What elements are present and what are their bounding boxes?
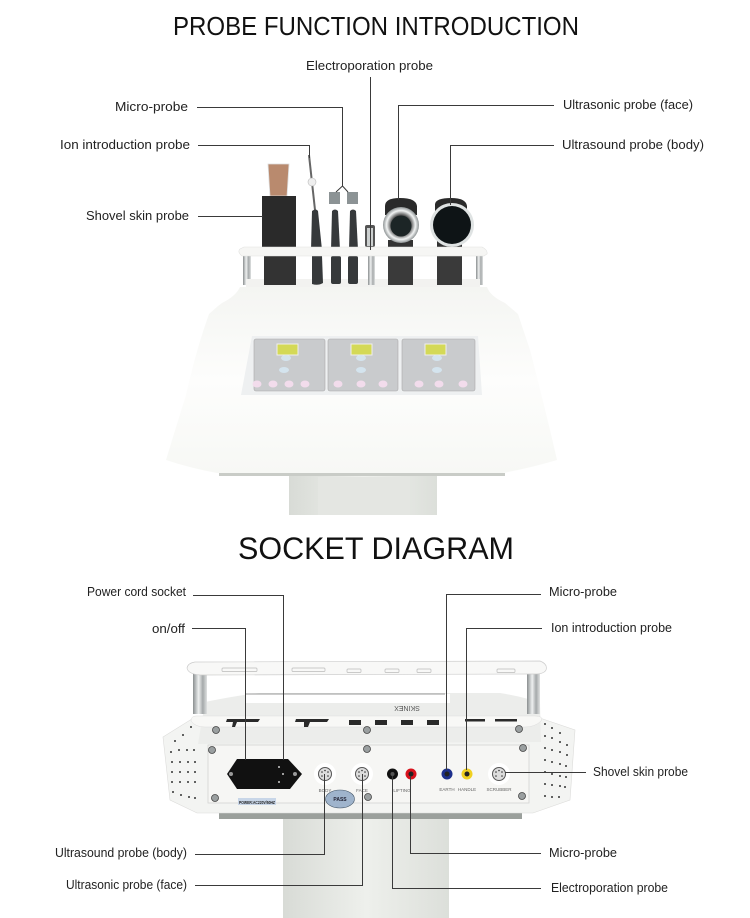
- label: power cord socket: Power cord socket: [87, 585, 186, 599]
- blue buttons: [279, 355, 442, 373]
- power label: POWER:AC220V/50HZ: [239, 800, 275, 805]
- label: on/off: on/off: [152, 622, 186, 636]
- rack front plate with slots: [191, 716, 542, 727]
- vent holes left: [170, 726, 196, 799]
- socket: handle yellow: HANDLE: [458, 787, 476, 792]
- socket: scrubber: [486, 763, 512, 792]
- probe rack: [243, 255, 483, 287]
- screws: [208, 726, 526, 802]
- rear plate: [208, 745, 529, 803]
- label: micro-probe lower: Micro-probe: [549, 846, 617, 860]
- title: socket diagram: SOCKET DIAGRAM: [238, 530, 514, 566]
- shovel skin probe: [262, 164, 296, 285]
- white label strip: [245, 694, 450, 711]
- socket: body: [314, 763, 336, 793]
- callouts: socket diagram: [55, 585, 688, 895]
- label: micro-probe right: [446, 585, 617, 770]
- pedestal: [289, 474, 437, 515]
- socket: lifting red: LIFTING: [393, 788, 411, 793]
- displays: [277, 344, 446, 355]
- lid: [198, 693, 541, 744]
- socket: body: BODY: [319, 788, 331, 793]
- pedestal: [219, 812, 522, 918]
- socket: face: FACE: [356, 788, 368, 793]
- power label: [238, 798, 276, 805]
- socket: earth blue: [439, 768, 455, 792]
- label: ion introduction probe: Ion introduction probe: [60, 137, 190, 152]
- label: electroporation probe lower: [392, 776, 668, 895]
- socket: handle yellow: [458, 768, 476, 792]
- label: electroporation probe: Electroporation probe: [306, 58, 433, 73]
- label: ion introduction probe: [60, 137, 310, 158]
- QC pass sticker: [326, 790, 354, 808]
- label: ultrasound probe (body) left: [55, 774, 324, 860]
- socket: lifting black: [387, 768, 398, 780]
- label: ultrasound probe (body): Ultrasound probe (body): [562, 137, 704, 152]
- control panel: [241, 336, 482, 395]
- label: power cord socket: [87, 585, 284, 760]
- label: ultrasonic probe (face) left: [66, 774, 362, 892]
- vent holes right: [544, 723, 568, 798]
- label: ultrasound probe (body): [450, 137, 704, 205]
- label: micro-probe: [115, 99, 348, 192]
- label: ion introduction probe right: [466, 621, 672, 770]
- label: ultrasonic probe (face): [398, 97, 693, 200]
- rear housing: [163, 717, 575, 813]
- socket: earth blue: EARTH: [439, 787, 455, 792]
- ultrasonic probe (face): [383, 198, 419, 285]
- callouts: probe function: [60, 58, 704, 250]
- electroporation probe: [365, 225, 375, 285]
- rack top plate: [187, 661, 546, 675]
- label: ultrasonic probe (face) left: Ultrasonic probe (face): [66, 878, 187, 892]
- label: on/off: [152, 622, 246, 760]
- QC pass sticker: PASS: [333, 797, 347, 803]
- white label strip: SKINEX: [394, 704, 420, 711]
- micro-probes: [329, 192, 358, 284]
- label: electroporation probe lower: Electroporation probe: [551, 881, 668, 895]
- label: micro-probe lower: [410, 776, 617, 860]
- socket: lifting red: [393, 768, 416, 793]
- label: ion introduction probe right: Ion introduction probe: [551, 621, 672, 635]
- main body: [166, 287, 557, 473]
- label: shovel skin probe right: Shovel skin probe: [593, 765, 688, 779]
- rack top plate: [239, 247, 487, 256]
- device: front view with probes: [166, 155, 557, 515]
- label: ultrasound probe (body) left: Ultrasound probe (body): [55, 846, 187, 860]
- rack posts: [193, 672, 540, 714]
- socket: face: [351, 763, 373, 793]
- ultrasound probe (body): [430, 198, 474, 285]
- pink buttons: [252, 380, 468, 388]
- power socket: [227, 759, 302, 789]
- label: shovel skin probe: Shovel skin probe: [86, 208, 189, 223]
- title: probe function introduction: PROBE FUNCTION INTRODUCTION: [173, 13, 579, 41]
- ion introduction probe: [308, 155, 323, 285]
- socket: scrubber: SCRUBBER: [486, 787, 512, 792]
- label: ultrasonic probe (face): Ultrasonic probe (face): [563, 97, 693, 112]
- label: micro-probe: Micro-probe: [115, 99, 188, 114]
- device: rear view with sockets: [163, 661, 575, 918]
- label: micro-probe right: Micro-probe: [549, 585, 617, 599]
